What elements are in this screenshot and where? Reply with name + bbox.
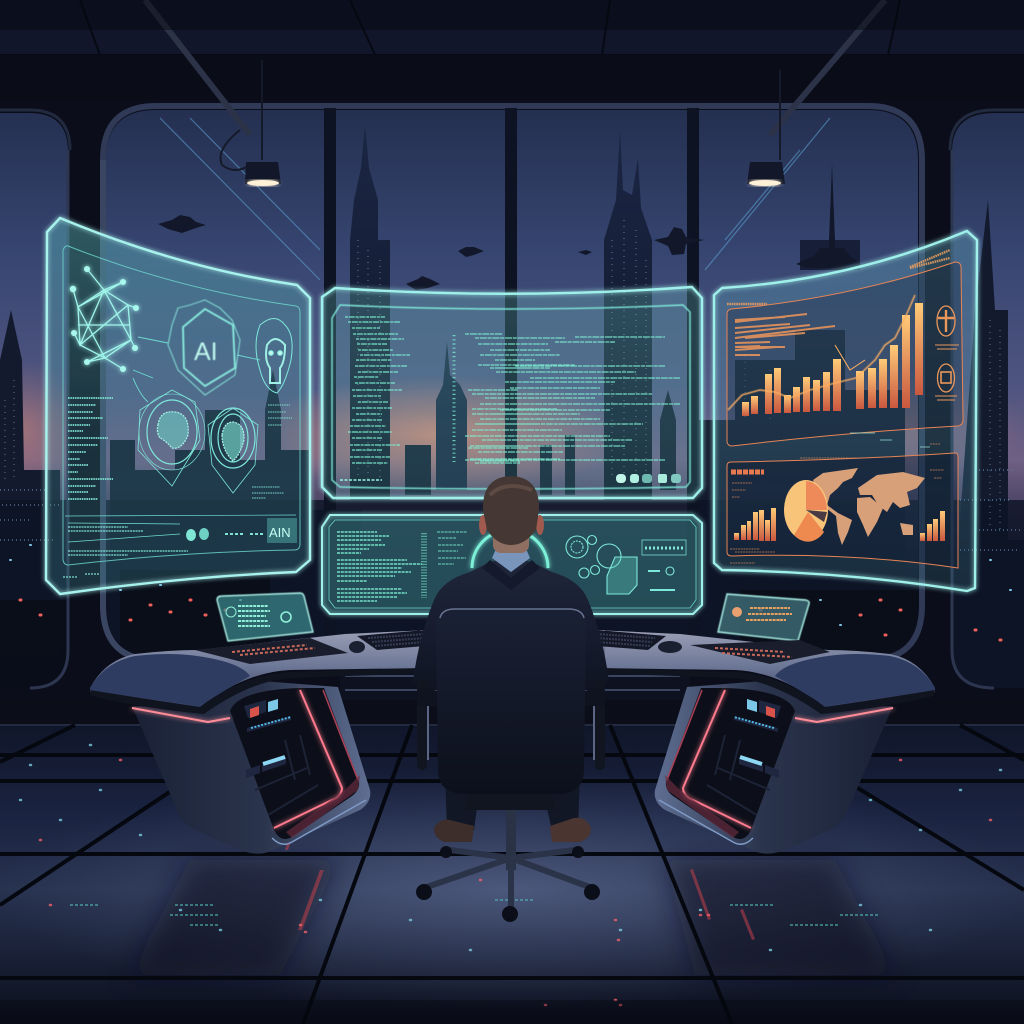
lower panel ticks [730,444,944,563]
window frames and mullions [0,106,1024,688]
trend line [728,295,915,410]
right twin tower [604,130,652,500]
city lights [20,600,1001,640]
left panel status bar [63,515,297,577]
left tablet screen [217,593,313,641]
right spire [800,165,860,270]
line numbers column [452,335,456,462]
bar chart [742,303,923,416]
center desk surface [420,630,605,674]
lower chart frame [727,453,958,568]
tower window lights [5,220,1000,530]
floor reflections [130,860,895,975]
flying vehicles [158,165,858,290]
left holographic panel [46,218,310,594]
AI hexagon badge: AI [194,338,218,366]
right code column [465,334,680,463]
office chair [416,608,605,922]
right ceiling lamp [747,0,885,186]
AI hexagon badge [168,300,240,395]
left panel status bar: AIN [269,525,291,540]
right tablet screen [718,594,809,641]
small bar chart left [734,508,776,541]
person head and torso [413,476,609,690]
person trousers and shoes [434,770,591,842]
orange text bars [735,314,835,355]
left spire tower [350,125,390,500]
center small tower [436,342,467,490]
left control pad [195,638,348,664]
right keyboard and mouse [597,630,682,653]
lower panel circle diagrams [566,536,686,594]
panel heading text lines [727,250,950,304]
inner frame [63,246,300,565]
skyline far buildings [0,200,1008,526]
left code column [345,317,410,463]
upper chart frame [727,262,963,446]
left panel list text lines [68,398,113,499]
right control pad [690,640,830,664]
lower panel code [337,532,422,601]
lower center holographic panel [322,515,702,614]
emblem icons [935,306,959,400]
left keyboard and mouse [349,630,425,653]
inner frame [332,305,690,489]
brain badge right [208,408,258,493]
pie chart [784,480,828,542]
connector lines [133,337,260,402]
world map [813,468,925,545]
lower panel circular arc behind head [472,530,548,568]
lower chart heading [731,470,764,474]
floor [0,725,1024,1024]
right desk wing and pedestal [595,630,935,854]
center main holographic panel [322,287,702,498]
window scene: sky and city [0,100,1024,700]
brain badge left [138,390,205,486]
network icon [70,266,139,372]
left desk wing and pedestal [90,630,430,854]
small bar chart right [920,511,945,541]
sill behind desk [340,660,690,700]
left ceiling lamp [145,0,281,186]
main panel footer [340,474,681,483]
right holographic panel [714,231,977,591]
skull icon [256,318,292,393]
